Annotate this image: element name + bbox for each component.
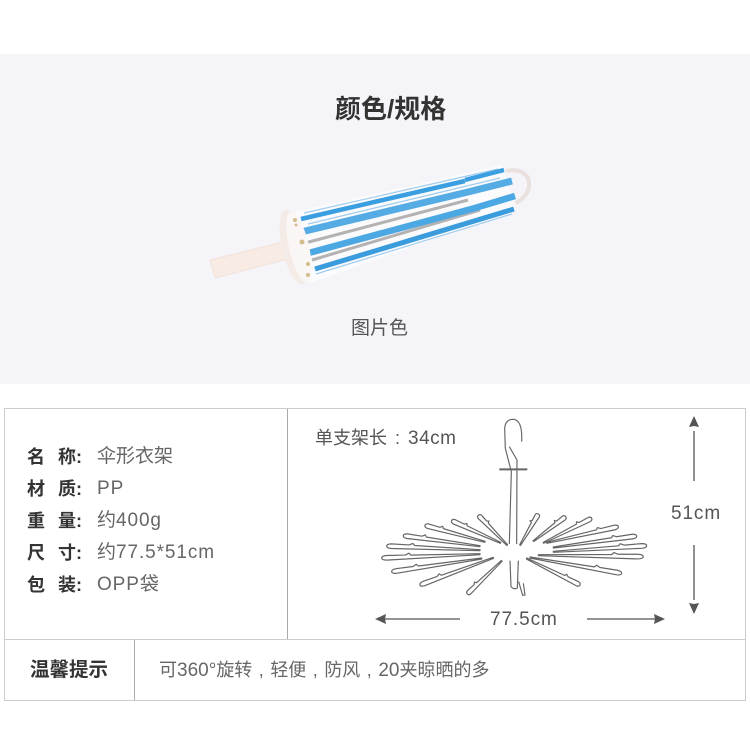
hook at end of folded hanger (506, 170, 529, 203)
spec: weight: 重 量: (27, 511, 82, 531)
spec: size: 尺 寸: (27, 543, 82, 563)
panel: colour and specification band (0, 54, 750, 384)
text: product note: , (313, 660, 318, 680)
spec: material (27, 478, 124, 499)
vertical divider lower (134, 640, 135, 700)
label: single arm length: 单支架长 34cm (315, 428, 456, 449)
spec: weight: 约400g (97, 510, 162, 531)
spec: name: 伞形衣架 (97, 446, 173, 467)
caption: picture colour: 图片色 (351, 318, 408, 339)
blue arms (301, 170, 504, 219)
spec: packaging: 包 装: (27, 575, 82, 595)
spec: size (27, 542, 215, 563)
white frame body (294, 165, 516, 283)
bottom clip (510, 561, 525, 595)
spec: weight (27, 510, 162, 531)
handle (210, 241, 292, 278)
grey inner rods (305, 200, 480, 260)
hanger stem and hook (499, 419, 527, 544)
spec list (27, 446, 215, 595)
text: product note: , (367, 660, 372, 680)
disc white rim (281, 210, 317, 284)
label: height 51cm: 51cm (671, 503, 721, 524)
horizontal divider (5, 639, 745, 640)
heading: warm tip: 温馨提示 (30, 659, 108, 681)
clip tips (293, 218, 310, 277)
label: single arm length: : (395, 428, 400, 448)
end disc (274, 207, 314, 287)
label: width 77.5cm: 77.5cm (490, 609, 558, 630)
spec table frame (4, 408, 746, 701)
arrow: width left (375, 614, 460, 624)
arrow: width right (587, 614, 665, 624)
spec: packaging: OPP袋 (97, 574, 159, 595)
right clips (517, 512, 647, 587)
heading: colour / specification: 颜色/规格 (335, 94, 446, 124)
spec: material: 材 质: (27, 479, 82, 499)
arrow: height up (689, 416, 699, 481)
text: product note: , (259, 660, 264, 680)
spec: name: 名 称: (27, 447, 82, 467)
vertical divider upper (287, 409, 288, 639)
spec: name (27, 446, 173, 467)
text: product note: 可360°旋转 轻便 防风 20夹晾晒的多 (159, 660, 489, 681)
spec: packaging (27, 574, 159, 595)
spec: material: PP (97, 478, 124, 499)
left clips (382, 513, 510, 596)
arrow: height down (689, 545, 699, 614)
spec: size: 约77.5*51cm (97, 542, 215, 563)
